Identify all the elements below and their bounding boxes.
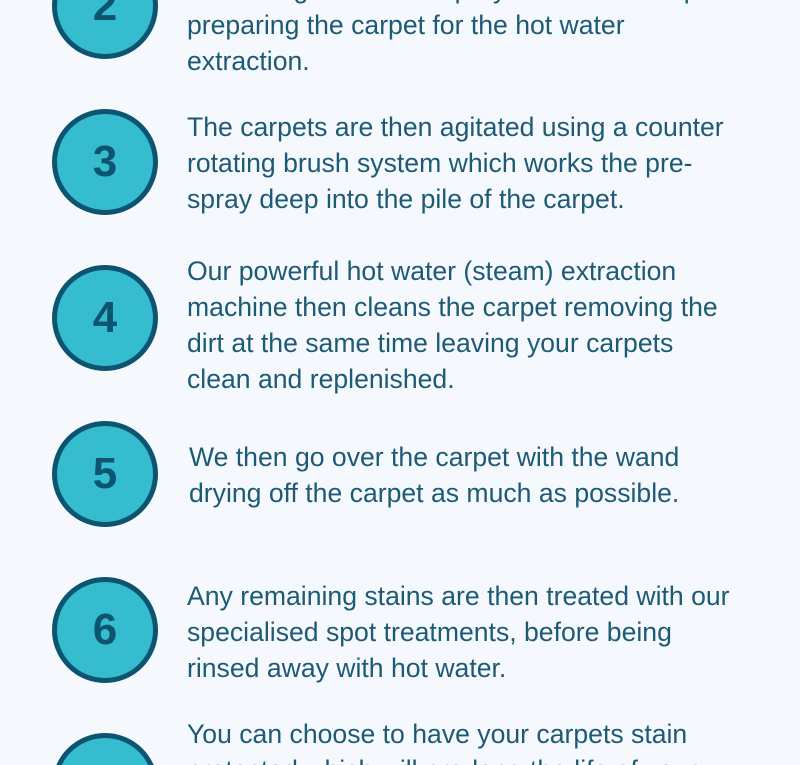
text 6: specialised spot treatments, before being <box>187 617 672 647</box>
circle 7 <box>52 733 158 765</box>
text 4: machine then cleans the carpet removing the <box>187 292 718 322</box>
circle 6: 6 <box>93 605 117 654</box>
text 6: rinsed away with hot water. <box>187 653 506 683</box>
step 4 <box>52 256 718 394</box>
circle 4 <box>52 265 158 371</box>
text 4: dirt at the same time leaving your carpets <box>187 328 673 358</box>
circle 3 <box>52 109 158 215</box>
step 6 <box>52 577 730 683</box>
text 6: Any remaining stains are then treated with our <box>187 581 730 611</box>
step 5 <box>52 421 679 527</box>
text 6 <box>187 581 730 683</box>
text 3 <box>187 112 724 214</box>
circle 6 <box>52 577 158 683</box>
text 5: We then go over the carpet with the wand <box>189 442 679 472</box>
step 2 <box>52 0 721 76</box>
text 3: spray deep into the pile of the carpet. <box>187 184 625 214</box>
text 7: You can choose to have your carpets stain <box>187 719 687 749</box>
circle 4: 4 <box>93 293 117 342</box>
text 2 <box>187 0 721 76</box>
text 5 <box>189 442 679 508</box>
text 5: drying off the carpet as much as possible. <box>189 478 679 508</box>
circle 5 <box>52 421 158 527</box>
step 7 <box>56 719 697 765</box>
text 2: preparing the carpet for the hot water <box>187 10 625 40</box>
text 4: Our powerful hot water (steam) extraction <box>187 256 676 286</box>
text 4: clean and replenished. <box>187 364 455 394</box>
text 3: The carpets are then agitated using a counter <box>187 112 724 142</box>
text 3: rotating brush system which works the pre- <box>187 148 692 178</box>
text 4 <box>187 256 718 394</box>
text 7 <box>187 719 697 765</box>
circle 5: 5 <box>93 449 117 498</box>
step 3 <box>52 109 724 215</box>
text 2: extraction. <box>187 46 310 76</box>
circle 3: 3 <box>93 137 117 186</box>
circle 2 <box>52 0 158 59</box>
